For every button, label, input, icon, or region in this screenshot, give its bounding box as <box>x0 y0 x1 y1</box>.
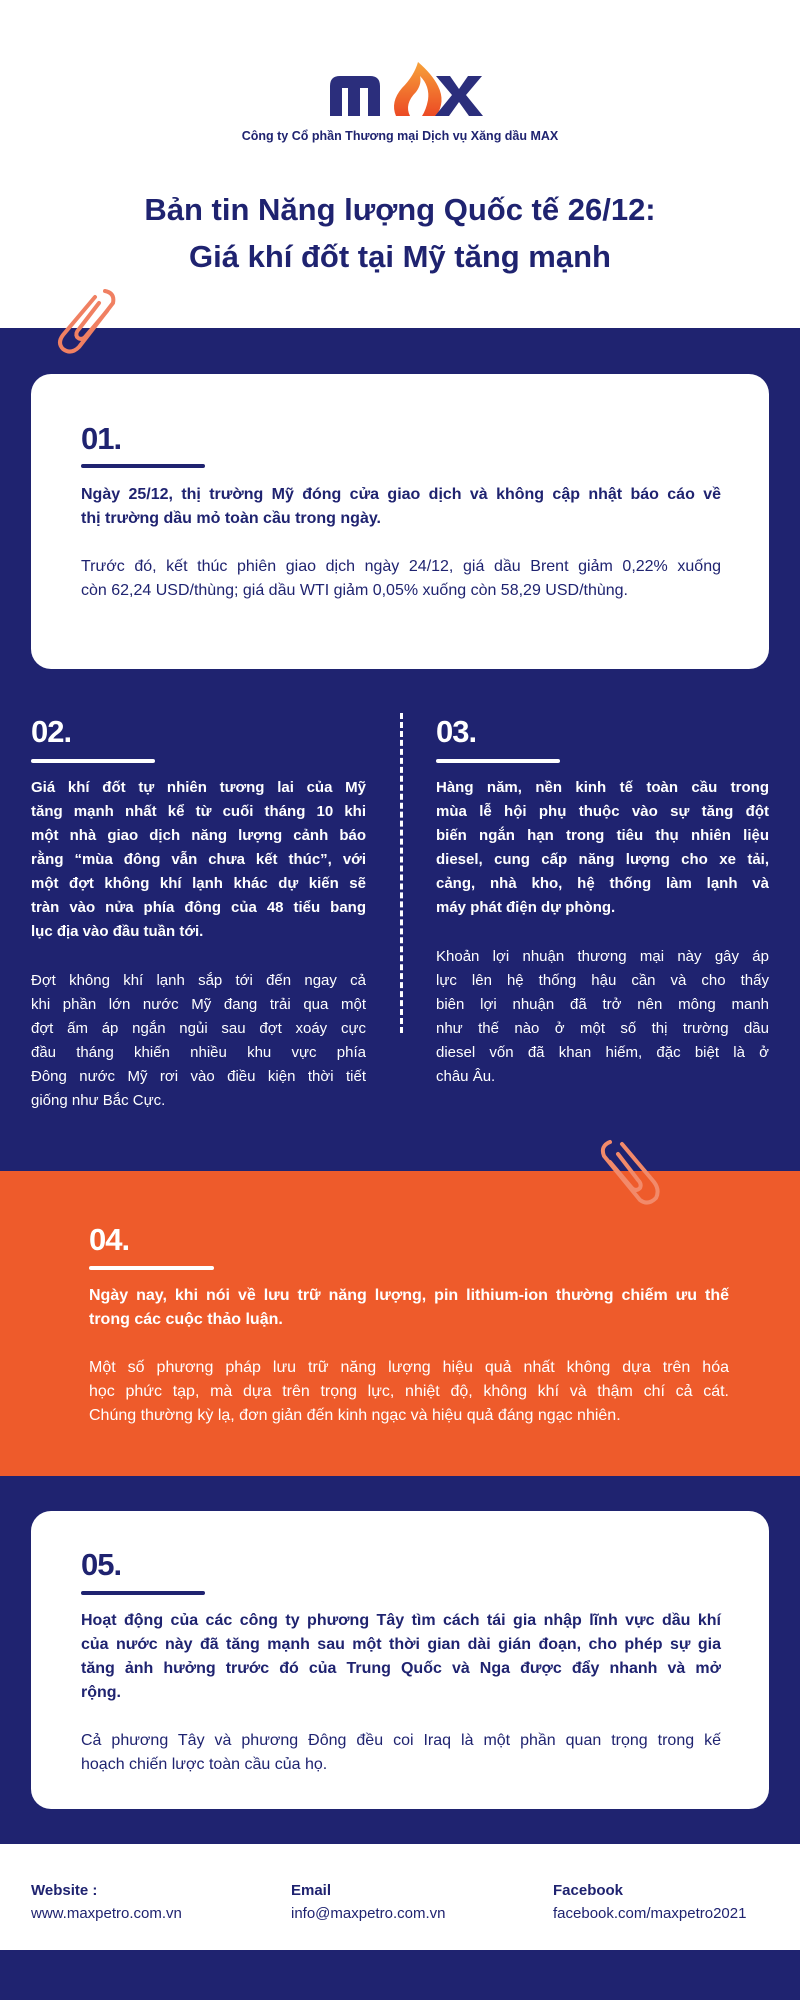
text block 03 normal <box>436 948 769 1085</box>
footer: website <box>31 1882 182 1922</box>
footer: email: Email <box>291 1882 331 1899</box>
text block 05 bold: của nước này đã tăng mạnh sau một thời gian dài gián đoạn, cho phép sự gia <box>81 1636 721 1653</box>
text block 03 bold <box>436 779 769 916</box>
text block 02 bold: một đợt không khí lạnh khác dự kiến sẽ <box>31 875 366 892</box>
subtitle: company name: Công ty Cổ phần Thương mại Dịch vụ Xăng dầu MAX <box>242 129 558 143</box>
panel: 01 card <box>31 374 769 669</box>
text block 03 normal: châu Âu. <box>436 1068 495 1085</box>
text block 01 bold: Ngày 25/12, thị trường Mỹ đóng cửa giao dịch và không cập nhật báo cáo về <box>81 486 721 503</box>
text block 01 normal: còn 62,24 USD/thùng; giá dầu WTI giảm 0,05% xuống còn 58,29 USD/thùng. <box>81 582 628 599</box>
text block 02 bold: Giá khí đốt tự nhiên tương lai của Mỹ <box>31 779 366 796</box>
text block 03 normal: Khoản lợi nhuận thương mại này gây áp <box>436 948 769 965</box>
text block 02 normal <box>31 972 366 1109</box>
bottom bar <box>0 1950 800 2000</box>
panel: 02 column: 02. <box>31 714 71 749</box>
text block 04 normal: Một số phương pháp lưu trữ năng lượng hiệu quả nhất không dựa trên hóa <box>89 1359 729 1376</box>
text block 03 bold: diesel, cung cấp năng lượng cho xe tải, <box>436 851 769 868</box>
footer: email <box>291 1882 445 1922</box>
icon: paperclip orange <box>600 1140 660 1205</box>
text block 04 bold <box>89 1287 729 1328</box>
text block 01 bold <box>81 486 721 527</box>
title <box>144 192 656 274</box>
text block 04 bold: trong các cuộc thảo luận. <box>89 1311 283 1328</box>
footer: email: info@maxpetro.com.vn <box>291 1905 445 1922</box>
heading 01: 01. <box>81 421 121 456</box>
text block 02 normal: Đông nước Mỹ rơi vào điều kiện thời tiết <box>31 1068 366 1085</box>
text block 04 normal: Chúng thường kỳ lạ, đơn giản đến kinh ngạc và hiệu quả đáng ngạc nhiên. <box>89 1407 621 1424</box>
text block 03 normal: lực lên hệ thống hậu cần và cho thấy <box>436 972 769 989</box>
footer <box>0 1844 800 1950</box>
text block 05 bold: tăng ảnh hưởng trước đó của Trung Quốc và Nga được đẩy nhanh và mở <box>81 1660 721 1677</box>
text block 02 bold: một nhà giao dịch năng lượng cảnh báo <box>31 827 366 844</box>
text block 05 bold: rộng. <box>81 1684 121 1701</box>
text block 02 bold: lục địa vào đầu tuần tới. <box>31 923 203 940</box>
text block 05 normal <box>81 1732 721 1773</box>
title: Bản tin Năng lượng Quốc tế 26/12: <box>144 192 656 227</box>
footer: website: Website : <box>31 1882 97 1899</box>
text block 03 bold: máy phát điện dự phòng. <box>436 899 615 916</box>
navy background lower <box>0 1476 800 1844</box>
text block 05 bold: Hoạt động của các công ty phương Tây tìm cách tái gia nhập lĩnh vực dầu khí <box>81 1612 721 1629</box>
text block 02 bold: tăng mạnh nhất kể từ cuối tháng 10 khi <box>31 803 366 820</box>
navy background <box>0 328 800 1171</box>
text block 02 normal: đầu tháng khiến nhiều khu vực phía <box>31 1044 366 1061</box>
footer: website: www.maxpetro.com.vn <box>31 1905 182 1922</box>
text block 01 normal <box>81 558 721 599</box>
text block 01 bold: thị trường dầu mỏ toàn cầu trong ngày. <box>81 510 381 527</box>
text block 05 normal: hoạch chiến lược toàn cầu của họ. <box>81 1756 327 1773</box>
panel: 03 column <box>436 714 769 1085</box>
text block 03 normal: diesel vốn đã khan hiếm, đặc biệt là ở <box>436 1044 769 1061</box>
text block 03 normal: như thế nào ở một số thị trường dầu <box>436 1020 769 1037</box>
title: Giá khí đốt tại Mỹ tăng mạnh <box>189 239 611 274</box>
text block 05 bold <box>81 1612 722 1701</box>
text block 02 bold: rằng “mùa đông vẫn chưa kết thúc”, với <box>31 851 366 868</box>
panel: 04 orange band: 04. <box>89 1222 129 1257</box>
text block 02 bold: tràn vào nửa phía đông của 48 tiểu bang <box>31 899 366 916</box>
text block 04 normal: học phức tạp, mà dựa trên trọng lực, nhiệt độ, không khí và thậm chí cả cát. <box>89 1383 729 1400</box>
text block 02 normal: Đợt không khí lạnh sắp tới đến ngay cả <box>31 972 366 989</box>
panel: 02 column <box>31 714 366 1109</box>
text block 04 bold: Ngày nay, khi nói về lưu trữ năng lượng, pin lithium-ion thường chiếm ưu thế <box>89 1287 729 1304</box>
footer: facebook: facebook.com/maxpetro2021 <box>553 1905 746 1922</box>
footer: facebook: Facebook <box>553 1882 623 1899</box>
text block 02 normal: giống như Bắc Cực. <box>31 1092 165 1109</box>
text block 03 normal: biên lợi nhuận đã trở nên mông manh <box>436 996 769 1013</box>
panel: 04 orange band <box>0 1171 800 1476</box>
text block 02 normal: khi phần lớn nước Mỹ đang trải qua một <box>31 996 366 1013</box>
icon: paperclip top <box>58 289 116 354</box>
panel: 05 card: 05. <box>81 1547 121 1582</box>
text block 03 bold: biến ngắn hạn trong tiêu thụ nhiên liệu <box>436 827 769 844</box>
footer: facebook <box>553 1882 746 1922</box>
text block 03 bold: Hàng năm, nền kinh tế toàn cầu trong <box>436 779 769 796</box>
divider dashed <box>400 713 403 1033</box>
text block 04 normal <box>89 1359 730 1424</box>
text block 02 bold <box>31 779 366 940</box>
text block 02 normal: đợt ấm áp ngắn ngủi sau đợt xoáy cực <box>31 1020 366 1037</box>
text block 01 normal: Trước đó, kết thúc phiên giao dịch ngày 24/12, giá dầu Brent giảm 0,22% xuống <box>81 558 721 575</box>
panel: 05 card <box>31 1511 769 1809</box>
text block 03 bold: mùa lễ hội phụ thuộc vào sự tăng đột <box>436 803 769 820</box>
text block 05 normal: Cả phương Tây và phương Đông đều coi Iraq là một phần quan trọng trong kế <box>81 1732 721 1749</box>
panel: 03 column: 03. <box>436 714 476 749</box>
text block 03 bold: cảng, nhà kho, hệ thống làm lạnh và <box>436 875 769 892</box>
logo <box>242 62 558 143</box>
